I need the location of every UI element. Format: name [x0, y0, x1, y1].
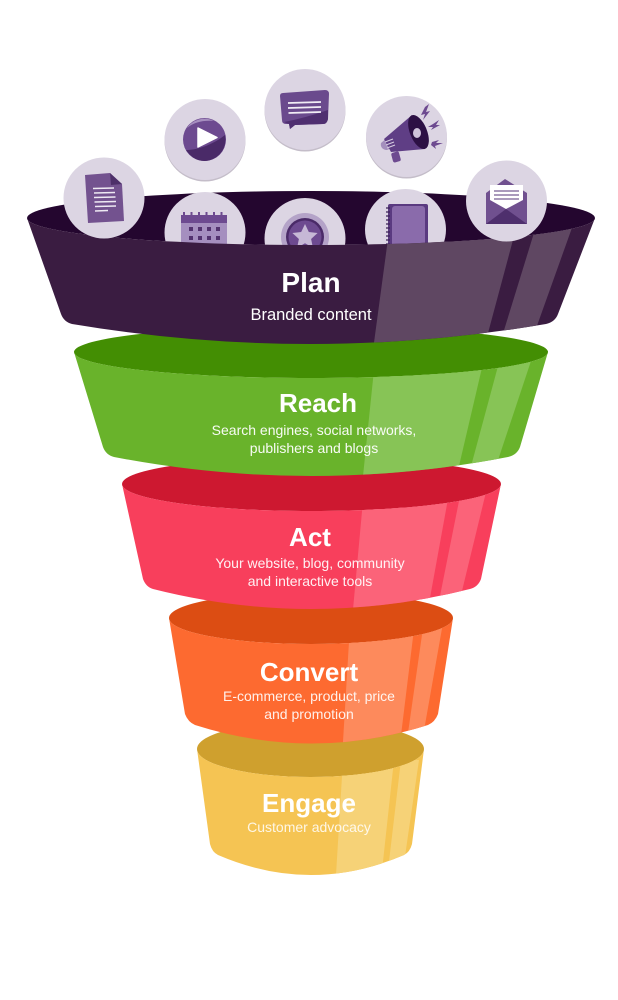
funnel tier: Engage: [197, 732, 424, 875]
heading: Reach: Reach: [279, 388, 357, 418]
funnel opening: [27, 191, 595, 245]
heading: Plan: Plan: [281, 267, 341, 298]
text: Convert description: E-commerce, product, price: [223, 688, 395, 704]
icon: calendar: [164, 192, 246, 273]
icon: document: [64, 158, 144, 238]
icon: notebook: [365, 189, 446, 270]
heading: Convert: Convert: [260, 657, 358, 687]
text: Engage description: Customer advocacy: [247, 819, 371, 835]
icon: megaphone: [366, 96, 447, 178]
text: Reach description: Search engines, social networks,: [212, 422, 416, 438]
text: Act description: Your website, blog, community: [215, 555, 405, 571]
icon: envelope: [466, 160, 547, 242]
funnel tier: Reach: [74, 326, 548, 480]
funnel front: [27, 218, 595, 350]
text: Plan description: Branded content: [250, 306, 372, 324]
icon: play button: [164, 99, 246, 182]
heading: Engage: Engage: [262, 788, 356, 818]
funnel tier: Convert: [169, 592, 453, 750]
funnel tier: Act: and interactive tools: [248, 573, 372, 589]
funnel tier: Act: [122, 457, 501, 615]
funnel tier: Convert: and promotion: [264, 706, 354, 722]
funnel tier: Plan: [27, 69, 595, 350]
icon: chat bubble: [264, 69, 346, 152]
icon: star medal: [264, 198, 346, 279]
heading: Act: Act: [289, 522, 331, 552]
funnel tier: Reach: publishers and blogs: [250, 440, 378, 456]
